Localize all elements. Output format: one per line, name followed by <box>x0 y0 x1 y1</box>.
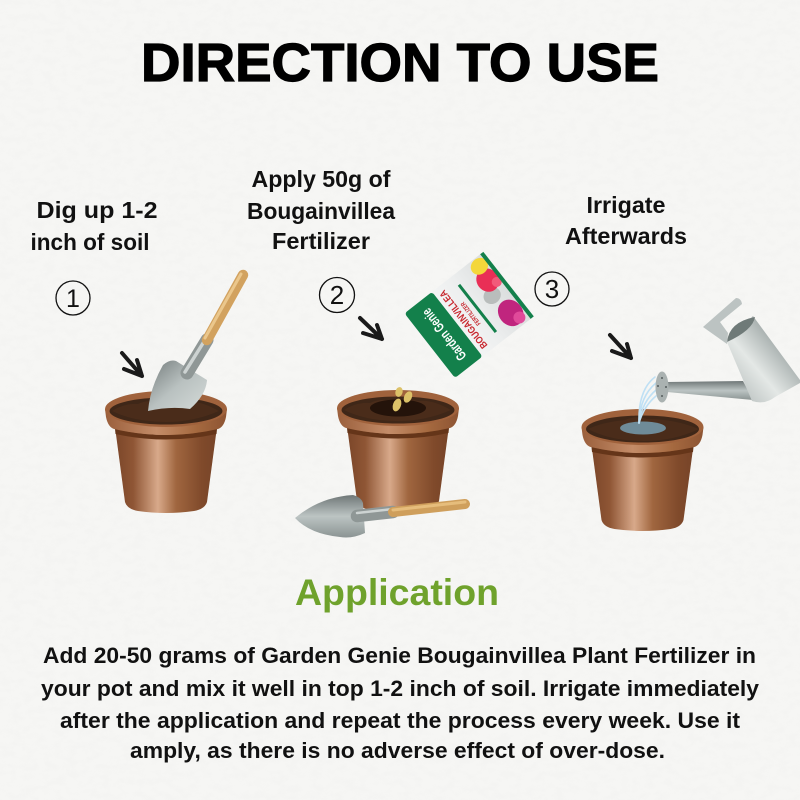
step 2 label <box>247 166 395 254</box>
icon: trowel in soil <box>148 274 243 411</box>
number 2 badge: 2 <box>330 280 344 310</box>
water stream <box>639 377 656 423</box>
step 2 label: Bougainvillea <box>247 198 395 224</box>
flowers <box>461 254 530 333</box>
arrow 3 <box>610 335 631 358</box>
application heading: Application <box>295 572 499 613</box>
trowel on ground <box>295 495 465 538</box>
title: DIRECTION TO USE <box>141 33 659 93</box>
step 1 label: Dig up 1-2 <box>36 197 158 223</box>
pot 1 with trowel <box>105 274 243 513</box>
number 3 badge <box>535 272 569 306</box>
pot 2 with seeds <box>337 386 459 512</box>
product name: BOUGAINVILLEA <box>438 288 490 350</box>
number 3 badge: 3 <box>545 274 559 304</box>
step 2 label: Fertilizer <box>272 228 370 254</box>
fertilizer bag: Garden Genie <box>418 305 469 364</box>
arrow 1 <box>122 353 142 376</box>
step 1 label <box>30 197 158 255</box>
step 3 label <box>565 192 687 249</box>
application paragraph: your pot and mix it well in top 1-2 inch of soil. Irrigate immediately <box>41 676 760 701</box>
can opening <box>727 317 755 342</box>
can spout <box>667 381 753 400</box>
number 1 badge: 1 <box>66 285 80 313</box>
step 3 label: Afterwards <box>565 223 687 249</box>
application paragraph: after the application and repeat the process every week. Use it <box>60 708 741 733</box>
bag header <box>405 292 483 378</box>
can rose <box>656 372 668 402</box>
fertilizer bag: FERTILIZER <box>460 300 483 327</box>
arrow 2 <box>360 318 382 339</box>
number 2 badge <box>320 278 354 312</box>
fertilizer granules <box>391 386 414 413</box>
can body <box>727 316 800 402</box>
step 3 label: Irrigate <box>586 192 666 218</box>
application paragraph: Add 20-50 grams of Garden Genie Bougainvillea Plant Fertilizer in <box>43 643 756 668</box>
fertilizer bag <box>405 252 534 378</box>
step 2 label: Apply 50g of <box>252 166 391 192</box>
water puddle <box>620 422 666 434</box>
can handle <box>703 298 742 344</box>
watering can <box>656 298 800 402</box>
number 1 badge <box>56 281 90 315</box>
step 1 label: inch of soil <box>30 229 150 255</box>
application paragraph: amply, as there is no adverse effect of over-dose. <box>130 738 665 763</box>
application paragraph <box>41 643 760 763</box>
pot 3 with water <box>582 409 704 531</box>
